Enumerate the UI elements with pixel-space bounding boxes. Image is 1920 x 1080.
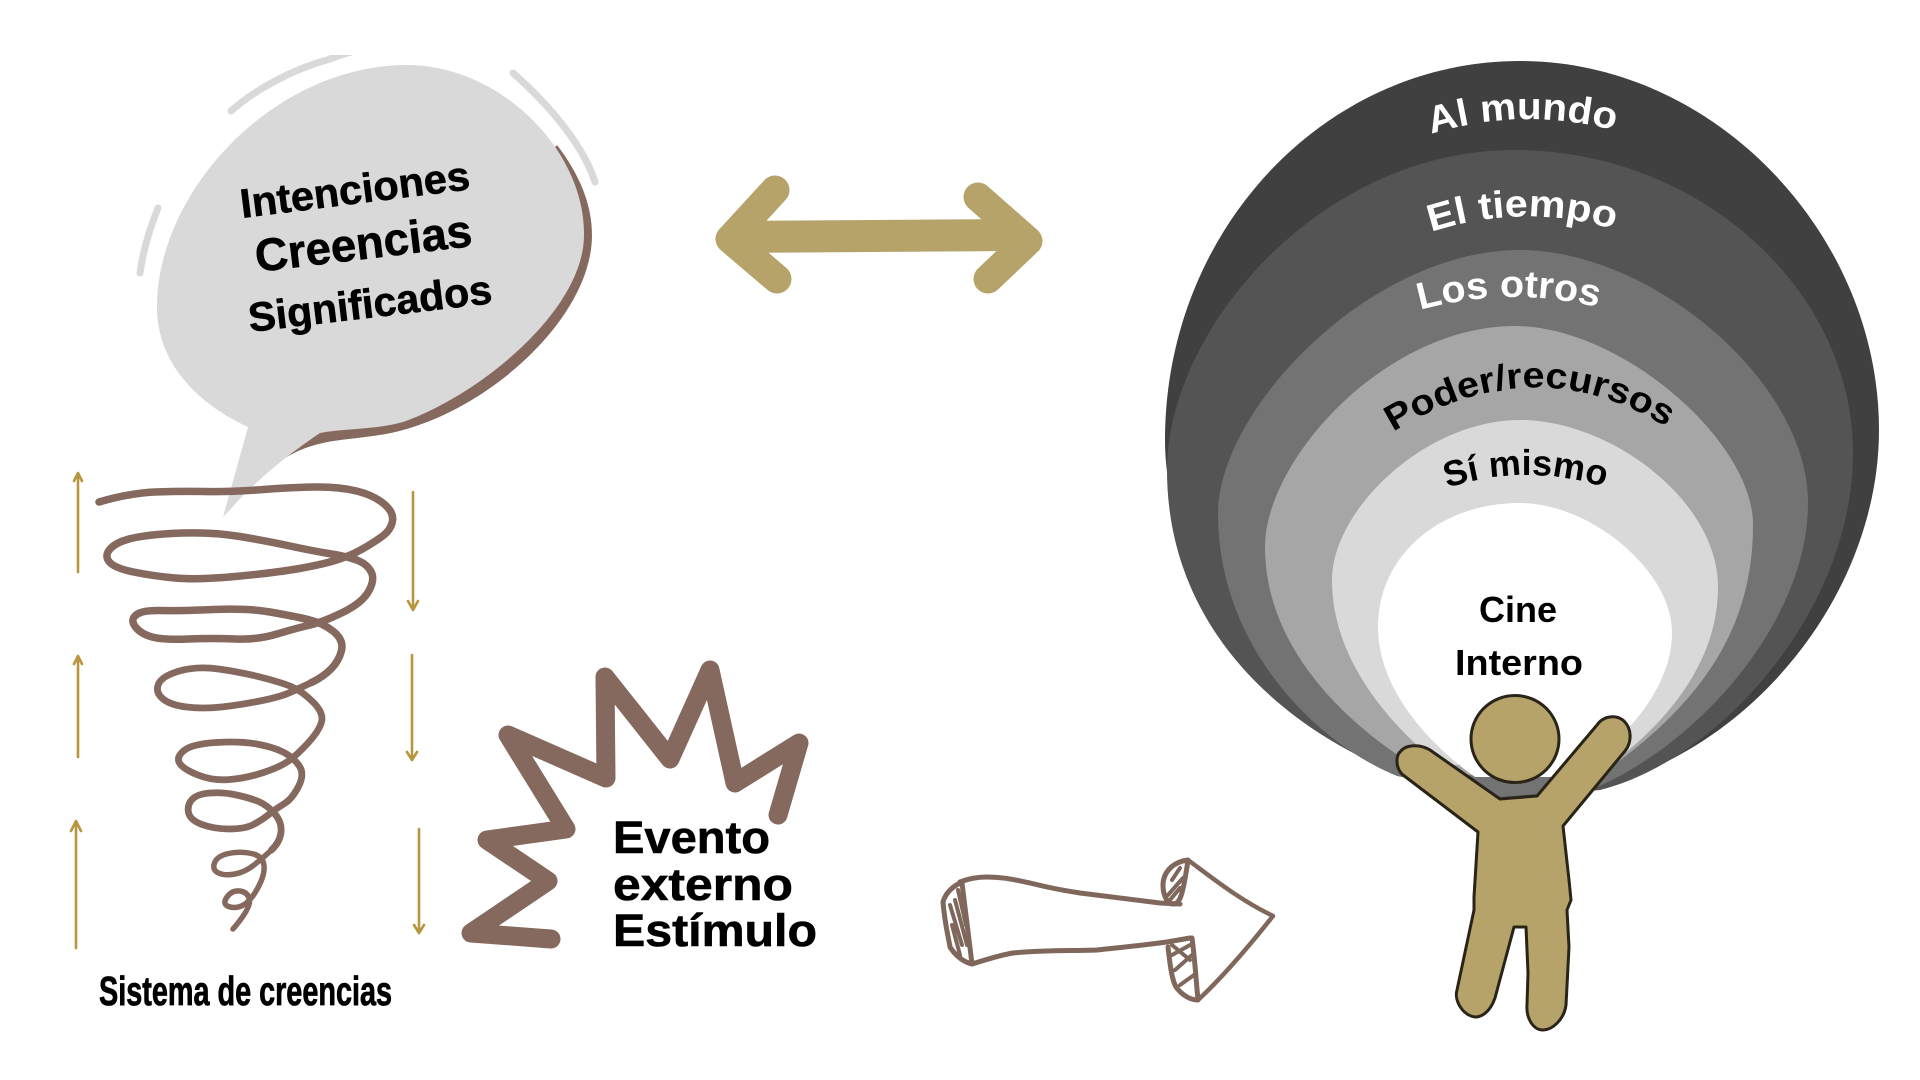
bubble shadow [225, 145, 592, 515]
gold arrows: rising and falling [71, 473, 424, 948]
bubble text: Intenciones: Intenciones [237, 152, 472, 227]
core: Cine Interno [1378, 503, 1672, 777]
ring: Al mundo [1165, 61, 1879, 795]
ring: Los otros [1218, 250, 1808, 797]
ring: Poder/recursos [1265, 326, 1753, 775]
figure: person holding the circles [1397, 696, 1630, 1030]
figure head [1471, 696, 1559, 782]
starburst: external event [471, 670, 799, 939]
ring: El tiempo [1167, 150, 1853, 800]
ring label: Poder/recursos: Poder/recursos [1383, 363, 1672, 430]
bubble body [157, 65, 584, 517]
double-headed arrow [730, 190, 1028, 279]
concentric circles: levels of the inner film [1165, 61, 1879, 798]
core label: Cine Interno: Cine [1479, 589, 1557, 630]
bubble text: Significados: Significados [246, 266, 494, 341]
ring label: Los otros: Los otros [1416, 272, 1600, 310]
figure body [1397, 717, 1630, 1030]
ring: Sí mismo [1332, 420, 1718, 765]
bubble text: Creencias: Creencias [252, 204, 475, 282]
ring label: El tiempo: El tiempo [1426, 190, 1616, 231]
ring label: Sí mismo: Sí mismo [1444, 448, 1606, 486]
panel: speech bubble [140, 44, 595, 517]
spiral: belief system tornado [99, 487, 393, 929]
text: Evento externo Estímulo: externo [613, 859, 793, 910]
label: Sistema de creencias: Sistema de creencias [99, 968, 392, 1014]
sketched arrow [943, 860, 1273, 1000]
motion arcs around bubble [140, 44, 595, 273]
text: Evento externo Estímulo: Estímulo [613, 905, 817, 956]
core label: Cine Interno: Interno [1455, 642, 1583, 683]
core label: Cine Interno [1455, 589, 1583, 683]
ring label: Al mundo: Al mundo [1432, 96, 1616, 134]
text: Evento externo Estímulo [613, 812, 817, 956]
text: Evento externo Estímulo: Evento [613, 812, 770, 863]
